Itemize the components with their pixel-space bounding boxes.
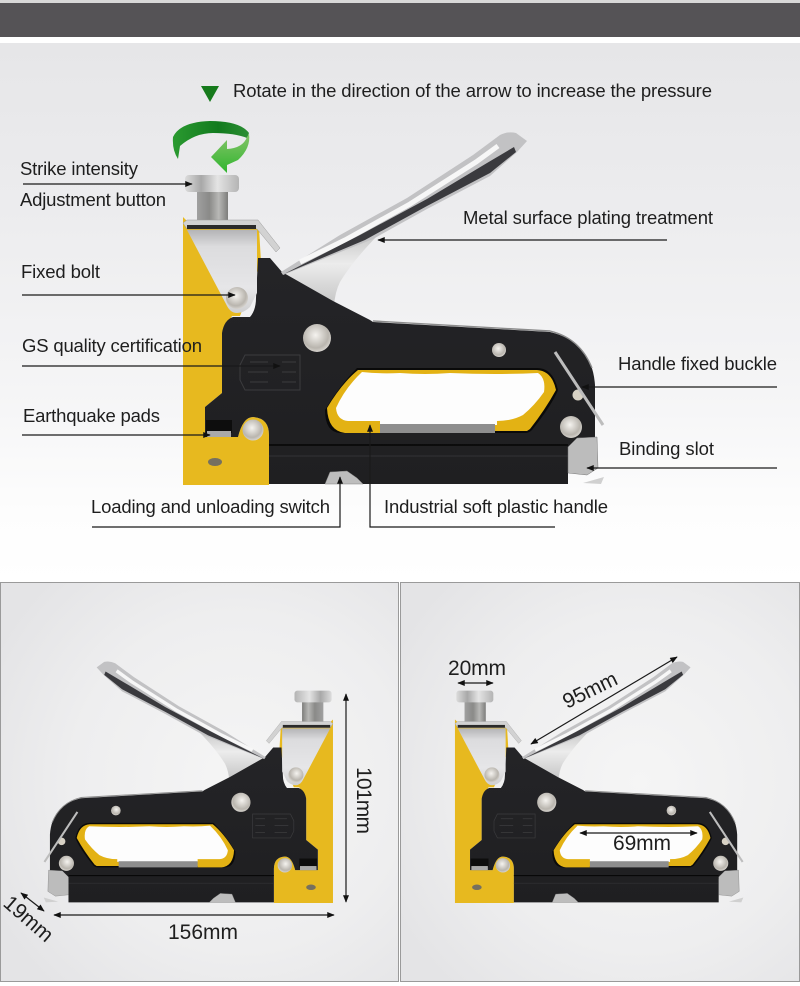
fixed buckle spring wire [555, 352, 603, 425]
black body [205, 258, 595, 484]
label: industrial soft plastic handle [370, 425, 608, 527]
label: earthquake pads: Earthquake pads [23, 405, 160, 426]
label: loading and unloading switch [91, 477, 340, 527]
label: metal surface plating treatment: Metal surface plating treatment [463, 207, 713, 228]
dimension: width 19mm: 19mm [0, 891, 58, 947]
top edge highlight [373, 321, 592, 368]
loading switch [325, 471, 363, 484]
dimension: knob 20mm: 20mm [448, 657, 506, 680]
dimension: grip 69mm: 69mm [613, 832, 671, 855]
instruction text: Rotate in the direction of the arrow to increase the pressure [233, 80, 712, 101]
left panel background [0, 582, 398, 982]
yellow magazine housing [183, 217, 269, 485]
top header bar [0, 0, 800, 37]
chrome lever rod [281, 132, 527, 275]
panel: front view dimensions [400, 582, 800, 982]
label: strike intensity: Adjustment button [20, 189, 166, 210]
label: strike intensity: Strike intensity [20, 158, 139, 179]
dimension: length 156mm: 156mm [168, 921, 238, 944]
adjustment knob [185, 175, 239, 223]
label: industrial soft plastic handle: Industrial soft plastic handle [384, 496, 608, 517]
label: fixed bolt: Fixed bolt [21, 261, 100, 282]
rod highlight [300, 146, 498, 262]
chrome front plate [187, 230, 257, 313]
dimension: grip 69mm [580, 832, 697, 855]
panel: back view dimensions [0, 582, 399, 982]
instruction marker: green triangle [201, 86, 219, 102]
binding slot chrome tab [568, 437, 604, 484]
stapler: front view small [455, 661, 743, 903]
dimension: height 101mm: 101mm [352, 767, 375, 834]
right panel background [400, 582, 800, 982]
rivets [208, 287, 584, 466]
label: binding slot: Binding slot [619, 438, 714, 459]
rotation arrow: green [173, 121, 249, 173]
chrome lever plate [282, 236, 377, 306]
dimension: handle 95mm: 95mm [559, 667, 621, 713]
label: GS quality certification: GS quality certification [22, 335, 202, 356]
stapler: front view with labels [183, 132, 604, 485]
handle grip: yellow rim and opening [325, 368, 558, 433]
label: strike intensity [20, 158, 192, 210]
shock pad [206, 420, 232, 437]
GS certification logo [240, 355, 300, 390]
chrome top flange [183, 220, 280, 252]
label: handle fixed buckle: Handle fixed buckle [618, 353, 777, 374]
stapler: mirrored back view [44, 661, 333, 903]
rod dark reflection [284, 147, 516, 274]
base seam lines [269, 445, 568, 456]
dimension: handle 95mm [531, 657, 677, 744]
label: loading and unloading switch: Loading and unloading switch [91, 496, 330, 517]
panel: main feature diagram [0, 43, 800, 582]
main panel background [0, 43, 800, 582]
plate dark top strip [187, 225, 256, 229]
